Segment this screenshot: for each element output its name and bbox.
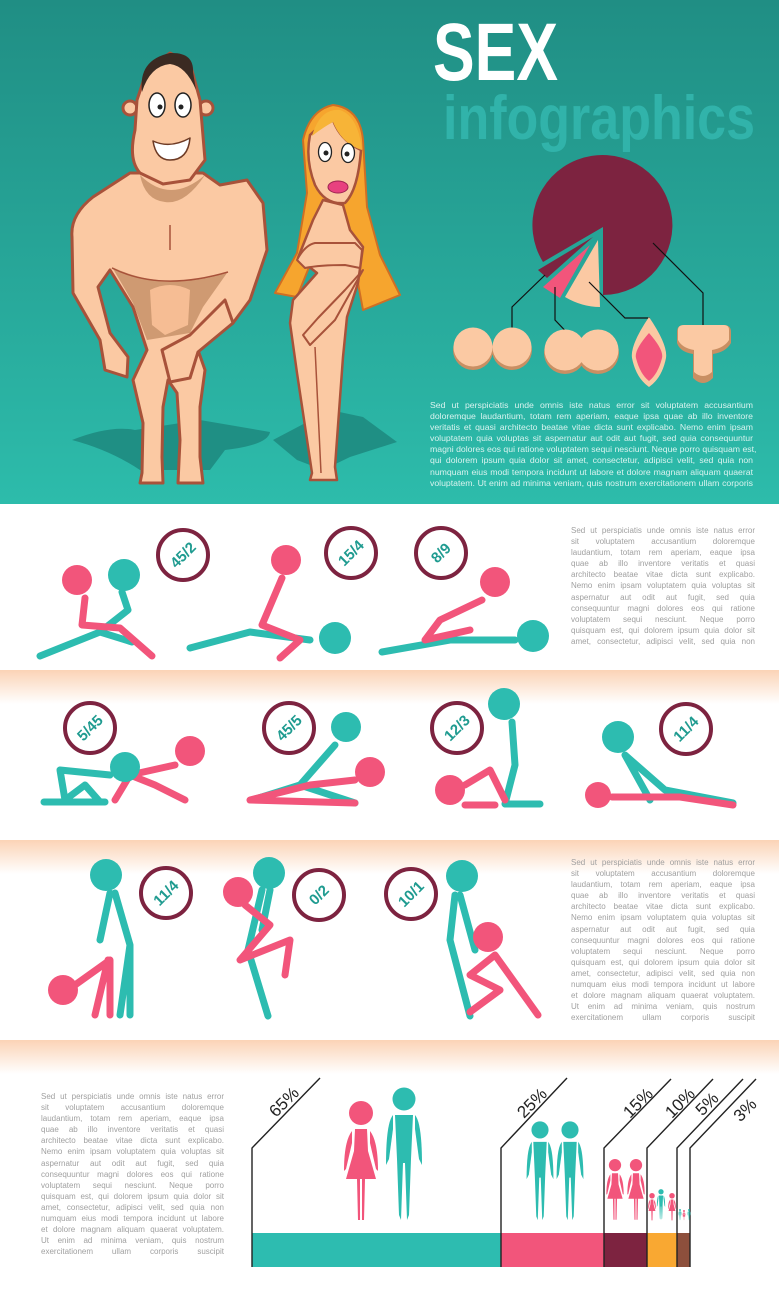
badge 11/4 lower xyxy=(141,868,191,918)
percentage labels: 5% xyxy=(692,1089,723,1120)
hero text block: veritatis et quasi architecto beatae vitae dicta sunt explicabo. Nemo enim ipsam xyxy=(430,422,753,432)
text block: chart section: et dolore magnam aliquam quaerat voluptatem. xyxy=(41,1225,224,1234)
peach band 3 xyxy=(0,1040,779,1074)
pictogram 10 xyxy=(446,860,538,1016)
badge 0/2 xyxy=(294,870,344,920)
text block: row 3: quae ab illo inventore veritatis et quasi xyxy=(571,891,755,900)
text block: chart section: Sed ut perspiciatis unde omnis iste natus error xyxy=(41,1092,224,1101)
text block: row 3: numquam eius modi tempora incidunt ut labore xyxy=(571,980,755,989)
woman pupils xyxy=(324,150,350,156)
man mouth xyxy=(153,138,190,160)
text block: chart section xyxy=(41,1092,224,1256)
percentage labels: 15% xyxy=(619,1084,657,1122)
badge 0/2: 0/2 xyxy=(306,882,333,909)
pie chart xyxy=(532,155,672,307)
percentage labels: 3% xyxy=(730,1095,761,1126)
text block: row 3: architecto beatae vitae dicta sunt explicabo. xyxy=(571,902,755,911)
man abdomen shading xyxy=(112,267,227,340)
badge 45/5: 45/5 xyxy=(273,712,306,745)
pictogram 6 xyxy=(435,688,540,805)
man eyes xyxy=(149,93,191,117)
text block: row 1: quisquam est, qui dolorem ipsum quia dolor sit xyxy=(571,626,755,635)
percentage labels xyxy=(265,1083,761,1126)
percentage labels: 65% xyxy=(265,1083,303,1121)
text block: chart section: Nemo enim ipsam voluptatem quia voluptas sit xyxy=(41,1147,224,1156)
pictogram 4 xyxy=(44,736,205,802)
pictogram 3 xyxy=(382,567,549,652)
text block: chart section: architecto beatae vitae dicta sunt explicabo. xyxy=(41,1136,224,1145)
pictogram 1 xyxy=(40,559,152,656)
icon: leaf shape xyxy=(632,317,666,387)
woman body xyxy=(290,200,363,480)
text block: row 3: Sed ut perspiciatis unde omnis iste natus error xyxy=(571,858,755,867)
man ears xyxy=(123,101,137,115)
text block: row 3: amet, consectetur, adipisci velit, sed quia non xyxy=(571,969,755,978)
hero text block: Sed ut perspiciatis unde omnis iste natus error sit voluptatem accusantium xyxy=(430,400,753,410)
percentage labels: 10% xyxy=(661,1084,699,1122)
people: two women xyxy=(606,1159,645,1220)
text block: chart section: amet, consectetur, adipisci velit, sed quia non xyxy=(41,1203,224,1212)
percentage bar chart xyxy=(252,1078,761,1267)
bar segments xyxy=(252,1233,690,1267)
text block: row 1 xyxy=(571,526,755,646)
badge 11/4 xyxy=(661,704,711,754)
text block: row 1: consequuntur magni dolores eos qui ratione xyxy=(571,604,755,613)
badge 15/4: 15/4 xyxy=(335,537,368,570)
people: small group xyxy=(648,1189,676,1220)
text block: row 3: exercitationem ullam corporis suscipit xyxy=(571,1013,755,1022)
woman leg line xyxy=(315,347,321,473)
peach band 2 xyxy=(0,840,779,874)
badge 8/9: 8/9 xyxy=(428,540,455,567)
text block: chart section: Ut enim ad minima veniam, quis nostrum xyxy=(41,1236,224,1245)
woman mouth xyxy=(328,181,348,193)
text block: chart section: exercitationem ullam corporis suscipit xyxy=(41,1247,224,1256)
woman crossed arm xyxy=(297,243,362,268)
woman eyes xyxy=(318,142,354,162)
figure shadows xyxy=(72,410,397,470)
text block: row 1: Nemo enim ipsam voluptatem quia voluptas sit xyxy=(571,581,755,590)
badge 10/1: 10/1 xyxy=(395,878,428,911)
badge 8/9 xyxy=(416,528,466,578)
hero text block: magni dolores eos qui ratione voluptatem sequi nesciunt. Neque porro quisquam est, xyxy=(430,444,756,454)
pie slice: pink xyxy=(543,245,590,298)
hero text block: qui dolorem ipsum quia dolor sit amet, consectetur, adipisci velit, sed quia non xyxy=(430,455,753,465)
text block: chart section: sit voluptatem accusantium doloremque xyxy=(41,1103,224,1112)
text block: row 3: quisquam est, qui dolorem ipsum quia dolor sit xyxy=(571,958,755,967)
text block: row 3: Ut enim ad minima veniam, quis nostrum xyxy=(571,1002,755,1011)
pictogram 7 xyxy=(585,721,733,808)
hero text block: doloremque laudantium, totam rem aperiam, eaque ipsa quae ab illo inventore xyxy=(430,411,753,421)
hero text block: voluptatem. Ut enim ad minima veniam, quis nostrum exercitationem ullam corporis xyxy=(430,478,753,488)
text block: chart section: aspernatur aut odit aut fugit, sed quia xyxy=(41,1159,224,1168)
icon: pair of round shapes 1 xyxy=(453,328,532,370)
text block: row 3: voluptatem sequi nesciunt. Neque porro xyxy=(571,947,755,956)
text block: row 1: Sed ut perspiciatis unde omnis iste natus error xyxy=(571,526,755,535)
badge 11/4 lower: 11/4 xyxy=(150,877,183,909)
pictogram 9 xyxy=(223,857,290,1016)
text block: row 3 xyxy=(571,858,755,1022)
leader lines xyxy=(512,243,703,343)
position pictograms xyxy=(40,545,733,1016)
text block: chart section: numquam eius modi tempora incidunt ut labore xyxy=(41,1214,224,1223)
badge 11/4: 11/4 xyxy=(670,713,703,745)
badge 5/45: 5/45 xyxy=(74,712,107,745)
badge 45/2 xyxy=(158,530,208,580)
text block: row 1: sit voluptatem accusantium doloremque xyxy=(571,537,755,546)
man neck shading xyxy=(140,175,205,202)
icon: pair of round shapes 2 xyxy=(544,330,619,374)
man chest lines xyxy=(112,225,228,281)
hero background xyxy=(0,0,779,504)
badge 12/3 xyxy=(432,703,482,753)
woman head xyxy=(308,120,361,203)
badge 12/3: 12/3 xyxy=(441,712,474,745)
icon: T shape xyxy=(677,325,731,383)
text block: row 1: amet, consectetur, adipisci velit, sed quia non xyxy=(571,637,755,646)
woman fringe xyxy=(312,110,362,150)
man hair xyxy=(142,53,196,92)
text block: row 3: sit voluptatem accusantium doloremque xyxy=(571,869,755,878)
title: SEX: SEX xyxy=(433,7,558,98)
people: two men xyxy=(527,1121,583,1220)
man head xyxy=(132,53,205,184)
hero text block: voluptatem quia voluptas sit aspernatur aut odit aut fugit, sed quia consequuntur xyxy=(430,433,753,443)
man body xyxy=(72,173,267,483)
people: couple xyxy=(344,1088,422,1220)
pie slice: peach xyxy=(565,240,600,307)
text block: row 3: et dolore magnam aliquam quaerat voluptatem. xyxy=(571,991,755,1000)
badge 15/4 xyxy=(326,528,376,578)
rating badges xyxy=(65,528,711,920)
pictogram 2 xyxy=(190,545,351,658)
badge 5/45 xyxy=(65,703,115,753)
hero text block: numquam eius modi tempora incidunt ut labore et dolore magnam aliquam quaerat xyxy=(430,467,753,477)
illustration: man xyxy=(72,53,267,483)
text block: row 1: architecto beatae vitae dicta sunt explicabo. xyxy=(571,570,755,579)
percentage labels: 25% xyxy=(513,1084,551,1122)
badge 45/5 xyxy=(264,703,314,753)
text block: row 1: aspernatur aut odit aut fugit, sed quia xyxy=(571,593,755,602)
woman hair xyxy=(275,105,400,310)
badge 45/2: 45/2 xyxy=(167,539,200,572)
man pupils xyxy=(158,104,184,110)
text block: chart section: quae ab illo inventore veritatis et quasi xyxy=(41,1125,224,1134)
text block: row 3: consequuntur magni dolores eos qui ratione xyxy=(571,936,755,945)
pictogram 8 xyxy=(48,859,130,1015)
text block: row 3: Nemo enim ipsam voluptatem quia voluptas sit xyxy=(571,913,755,922)
pictogram 5 xyxy=(250,712,385,803)
hero text block xyxy=(430,400,756,488)
text block: row 3: laudantium, totam rem aperiam, eaque ipsa xyxy=(571,880,755,889)
bar outlines xyxy=(252,1078,756,1267)
pie main slice xyxy=(532,155,672,295)
text block: row 1: voluptatem sequi nesciunt. Neque porro xyxy=(571,615,755,624)
woman lower arm and hand xyxy=(303,270,363,345)
peach band 1 xyxy=(0,670,779,704)
man forearm and hand xyxy=(162,300,233,382)
text block: row 3: aspernatur aut odit aut fugit, sed quia xyxy=(571,925,755,934)
text block: chart section: quisquam est, qui dolorem ipsum quia dolor sit xyxy=(41,1192,224,1201)
text block: row 1: laudantium, totam rem aperiam, eaque ipsa xyxy=(571,548,755,557)
text block: row 1: quae ab illo inventore veritatis et quasi xyxy=(571,559,755,568)
text block: chart section: voluptatem sequi nesciunt. Neque porro xyxy=(41,1181,224,1190)
illustration: woman xyxy=(275,105,400,480)
pie slice: thin maroon xyxy=(538,237,593,278)
people: tiny group xyxy=(678,1209,691,1220)
text block: chart section: laudantium, totam rem aperiam, eaque ipsa xyxy=(41,1114,224,1123)
badge 10/1 xyxy=(386,869,436,919)
man abs patch xyxy=(150,285,190,335)
text block: chart section: consequuntur magni dolores eos qui ratione xyxy=(41,1170,224,1179)
